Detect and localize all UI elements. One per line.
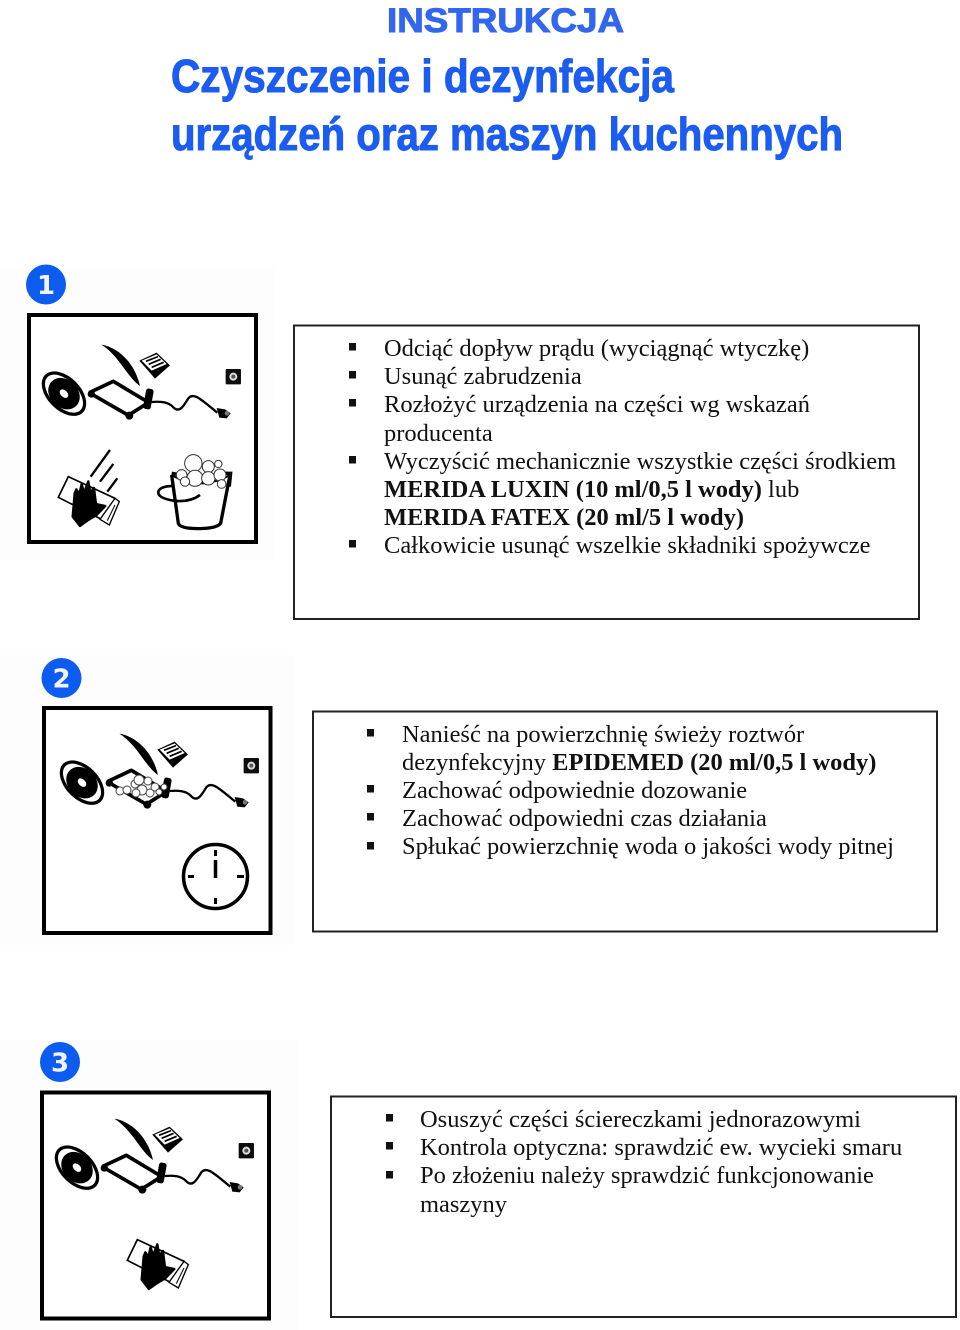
- step 1 badge: [26, 264, 66, 304]
- text block: Usunąć zabrudzenia: [384, 363, 582, 390]
- icon: clock: [184, 844, 248, 908]
- step 3 badge: 3: [51, 1048, 69, 1078]
- step 2 badge: [42, 658, 82, 698]
- text block: Kontrola optyczna: sprawdzić ew. wycieki smaru: [420, 1134, 902, 1161]
- text block: Zachować odpowiednie dozowanie: [402, 777, 747, 804]
- text block: producenta: [384, 420, 493, 447]
- heading: subject: [171, 50, 843, 160]
- icon: hand wiping with cloth: [58, 450, 119, 526]
- title: INSTRUKCJA: INSTRUKCJA: [387, 2, 624, 40]
- text block: Osuszyć części ściereczkami jednorazowymi: [420, 1106, 861, 1133]
- panel: step 3 instructions: [331, 1096, 956, 1317]
- step 1 badge: 1: [37, 271, 55, 301]
- icon: machine: [46, 1119, 254, 1198]
- bullets: [367, 729, 374, 850]
- step 3 badge: [40, 1042, 80, 1082]
- heading: subject: urządzeń oraz maszyn kuchennych: [171, 108, 843, 160]
- bullets: [349, 343, 356, 548]
- text block: [420, 1106, 902, 1218]
- step 1 illustration: [29, 315, 256, 542]
- icon: hand drying with cloth: [127, 1240, 188, 1289]
- text block: [402, 721, 894, 860]
- text block: MERIDA LUXIN (10 ml/0,5 l wody) lub: [384, 476, 799, 503]
- panel: step 2 instructions: [313, 712, 937, 932]
- text block: dezynfekcyjny EPIDEMED (20 ml/0,5 l wody): [402, 749, 876, 776]
- text block: maszyny: [420, 1191, 508, 1218]
- text block: Spłukać powierzchnię woda o jakości wody pitnej: [402, 833, 894, 860]
- text block: Wyczyścić mechanicznie wszystkie części środkiem: [384, 448, 896, 475]
- text block: Całkowicie usunąć wszelkie składniki spożywcze: [384, 532, 871, 559]
- text block: Zachować odpowiedni czas działania: [402, 805, 767, 832]
- bullets: [386, 1114, 393, 1178]
- icon: bucket with foam: [158, 455, 231, 529]
- text block: [384, 335, 896, 559]
- text block: MERIDA FATEX (20 ml/5 l wody): [384, 504, 744, 531]
- text block: Nanieść na powierzchnię świeży roztwór: [402, 721, 804, 748]
- text block: Po złożeniu należy sprawdzić funkcjonowanie: [420, 1162, 874, 1189]
- text block: Odciąć dopływ prądu (wyciągnąć wtyczkę): [384, 335, 809, 362]
- heading: subject: Czyszczenie i dezynfekcja: [171, 50, 674, 102]
- icon: machine with foam: [51, 734, 259, 813]
- text block: Rozłożyć urządzenia na części wg wskazań: [384, 391, 810, 418]
- icon: disassembled machine: [33, 345, 241, 424]
- step 3 illustration: [42, 1092, 269, 1318]
- step 2 illustration: [44, 708, 270, 933]
- panel: step 1 instructions: [294, 326, 919, 619]
- step 2 badge: 2: [52, 664, 71, 694]
